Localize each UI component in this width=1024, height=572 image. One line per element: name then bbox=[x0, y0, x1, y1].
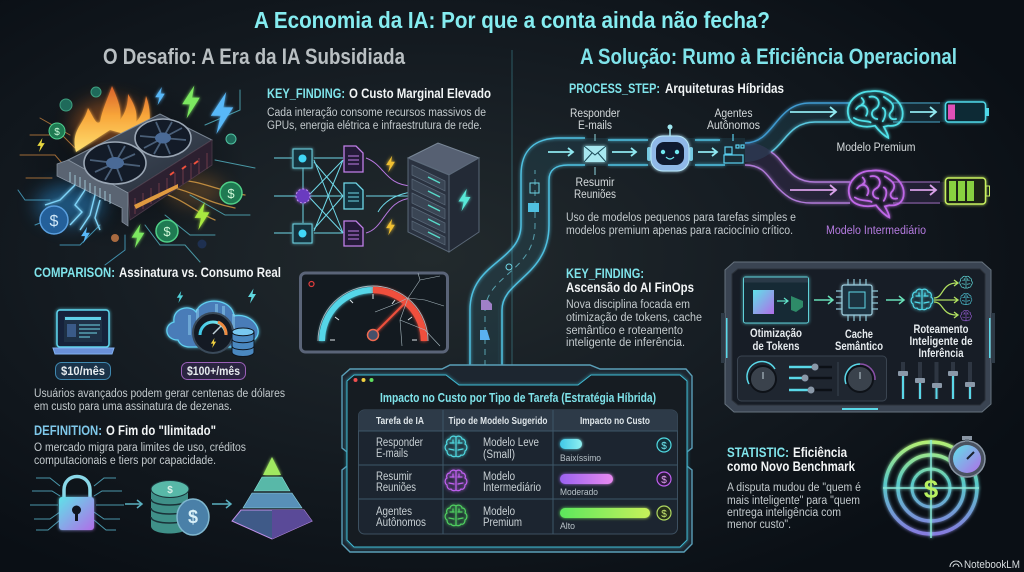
text block: statistic bbox=[727, 445, 861, 531]
label: resumir reunioes bbox=[574, 177, 616, 201]
heading: right column: A Solução: Rumo à Eficiência Operacional bbox=[580, 44, 957, 69]
row: responder e-mails: Baixíssimo bbox=[560, 453, 601, 464]
arrow: to routing bbox=[886, 296, 904, 304]
text block: statistic: entrega inteligência com bbox=[727, 507, 841, 519]
table header: Tipo de Modelo Sugerido bbox=[448, 415, 548, 427]
row: resumir reunioes: Reuniões bbox=[376, 482, 416, 494]
icon: premium brain bbox=[848, 91, 903, 138]
text block: process step heading bbox=[569, 81, 784, 96]
label: token optimization: de Tokens bbox=[752, 339, 800, 353]
text block: definition: O mercado migra para limites de uso, créditos bbox=[34, 442, 246, 454]
row: responder e-mails: $ bbox=[661, 441, 667, 452]
label: resumir reunioes: Resumir bbox=[576, 177, 615, 189]
label: inference routing: Inteligente de bbox=[910, 334, 973, 348]
heading: comparison: COMPARISON: bbox=[34, 265, 115, 280]
label: modelo intermediario: Modelo Intermediário bbox=[826, 225, 926, 237]
row: responder e-mails bbox=[376, 436, 671, 464]
icon: agent folder bbox=[724, 134, 744, 163]
label: inference routing bbox=[910, 322, 973, 360]
text block: process step heading: Arquiteturas Híbridas bbox=[665, 81, 784, 96]
row: agentes autonomos: Autônomos bbox=[376, 517, 426, 529]
row: responder e-mails: (Small) bbox=[483, 449, 515, 461]
icon: cloud usage meter bbox=[167, 288, 258, 356]
label: inference routing: Roteamento bbox=[914, 322, 968, 336]
text block: hybrid usage: Uso de modelos pequenos para tarefas simples e bbox=[566, 212, 796, 224]
illustration: overheating GPU: $ bbox=[227, 186, 235, 201]
row: resumir reunioes: Intermediário bbox=[483, 482, 541, 494]
label: resumir reunioes: Reuniões bbox=[574, 189, 616, 201]
text block: definition: DEFINITION: bbox=[34, 423, 102, 438]
text block: statistic: menor custo". bbox=[727, 519, 791, 531]
text block: comparison note: em custo para uma assinatura de dezenas. bbox=[34, 401, 232, 413]
text block: AI FinOps bbox=[566, 266, 702, 349]
panel: broken speedometer bbox=[300, 273, 448, 352]
row: responder e-mails: E-mails bbox=[376, 448, 408, 460]
diagram: network to server bbox=[274, 143, 479, 252]
arrow: to cache bbox=[814, 296, 833, 304]
text block: key finding, marginal cost: GPUs, energia elétrica e infraestrutura de rede. bbox=[267, 120, 482, 132]
label: semantic cache bbox=[835, 327, 883, 353]
illustration: road through hybrid architecture bbox=[470, 103, 945, 366]
text block: AI FinOps: otimização de tokens, cache bbox=[566, 312, 702, 324]
illustration: overheating GPU: $ bbox=[54, 127, 60, 138]
label: ten per month: $10/mês bbox=[61, 364, 105, 378]
arrow: coins to pyramid bbox=[212, 500, 231, 508]
text block: statistic: A disputa mudou de "quem é bbox=[727, 482, 861, 494]
text block: statistic: Eficiência bbox=[793, 445, 847, 460]
label: inference routing: Inferência bbox=[918, 346, 964, 360]
panel: cost impact table bbox=[342, 365, 692, 552]
text block: key finding, marginal cost bbox=[267, 86, 491, 132]
row: resumir reunioes bbox=[376, 470, 671, 498]
label: responder e-mails: Responder bbox=[570, 108, 620, 120]
arrow: padlock to coins bbox=[125, 500, 142, 508]
label: hundred per month: $100+/mês bbox=[187, 364, 240, 378]
icon: intermediate brain bbox=[849, 170, 904, 217]
label: token optimization bbox=[750, 326, 802, 353]
row: resumir reunioes: Resumir bbox=[376, 471, 412, 483]
icon: target with stopwatch: $ bbox=[924, 474, 939, 504]
text block: comparison note: Usuários avançados podem gerar centenas de dólares bbox=[34, 388, 285, 400]
text block: process step heading: PROCESS_STEP: bbox=[569, 81, 660, 96]
text block: AI FinOps: inteligente de inferência. bbox=[566, 337, 685, 349]
table header bbox=[376, 415, 650, 427]
text block: AI FinOps: Ascensão do AI FinOps bbox=[566, 280, 694, 295]
text block: key finding, marginal cost: Cada interação consome recursos massivos de bbox=[267, 107, 486, 119]
text block: key finding, marginal cost: O Custo Marginal Elevado bbox=[349, 86, 491, 101]
text block: definition: O Fim do "Ilimitado" bbox=[106, 423, 216, 438]
heading: comparison bbox=[34, 265, 281, 280]
label: responder e-mails bbox=[570, 108, 620, 132]
row: agentes autonomos: Alto bbox=[560, 521, 575, 532]
illustration: overheating GPU: $ bbox=[163, 224, 171, 239]
title: A Economia da IA: Por que a conta ainda não fecha? bbox=[254, 7, 770, 33]
icon: full battery bbox=[946, 178, 990, 204]
icon: coin stack: $ bbox=[188, 507, 198, 527]
icon: robot bbox=[647, 124, 693, 171]
center divider line bbox=[511, 50, 513, 366]
row: agentes autonomos: Agentes bbox=[376, 506, 412, 518]
row: agentes autonomos: Modelo bbox=[483, 506, 515, 518]
text block: AI FinOps: KEY_FINDING: bbox=[566, 266, 644, 281]
row: resumir reunioes: Moderado bbox=[560, 487, 598, 498]
text block: AI FinOps: semântico e roteamento bbox=[566, 325, 683, 337]
sub-panel: knobs and sliders bbox=[738, 356, 886, 401]
row: responder e-mails: Modelo Leve bbox=[483, 437, 539, 449]
panel: FinOps console bbox=[721, 262, 995, 412]
sub-panel: faders bbox=[898, 362, 975, 399]
illustration: overheating GPU bbox=[15, 80, 255, 265]
text block: key finding, marginal cost: KEY_FINDING: bbox=[267, 86, 345, 101]
icon: low battery bbox=[946, 102, 989, 122]
row: responder e-mails: Responder bbox=[376, 437, 423, 449]
sub-icon: semantic cache chip bbox=[836, 279, 878, 321]
icon: envelope bbox=[584, 134, 606, 175]
icon: target with stopwatch bbox=[883, 436, 985, 538]
label: agentes autonomos: Autônomos bbox=[707, 120, 760, 132]
label: semantic cache: Cache bbox=[845, 327, 873, 341]
label: agentes autonomos: Agentes bbox=[714, 108, 753, 120]
illustration: overheating GPU: $ bbox=[50, 213, 59, 230]
table header: Impacto no Custo bbox=[580, 415, 650, 427]
text block: statistic: STATISTIC: bbox=[727, 445, 789, 460]
text block: definition: computacionais e tiers por capacidade. bbox=[34, 455, 216, 467]
table header: Tarefa de IA bbox=[376, 415, 424, 427]
label: semantic cache: Semântico bbox=[835, 339, 883, 353]
row: agentes autonomos: $ bbox=[661, 509, 667, 520]
icon: tier pyramid bbox=[232, 457, 312, 539]
heading: comparison: Assinatura vs. Consumo Real bbox=[119, 265, 281, 280]
sub-icon: routing brain bbox=[911, 276, 972, 321]
row: agentes autonomos bbox=[376, 505, 671, 532]
text block: hybrid usage bbox=[566, 212, 796, 237]
table grid bbox=[358, 410, 678, 534]
icon: coin stack: $ bbox=[167, 485, 173, 496]
text block: definition bbox=[34, 423, 246, 467]
table title: Impacto no Custo por Tipo de Tarefa (Estratégia Híbrida) bbox=[380, 391, 656, 405]
sub-icon: token optimization window bbox=[744, 277, 808, 323]
label: modelo premium: Modelo Premium bbox=[836, 142, 916, 154]
text block: comparison note bbox=[34, 388, 285, 413]
icon: coin stack bbox=[151, 480, 209, 535]
text block: hybrid usage: modelos premium apenas para raciocínio crítico. bbox=[566, 225, 793, 237]
row: resumir reunioes: $ bbox=[661, 475, 667, 486]
heading: left column: O Desafio: A Era da IA Subsidiada bbox=[103, 44, 406, 69]
label: agentes autonomos bbox=[707, 108, 760, 132]
row: resumir reunioes: Modelo bbox=[483, 471, 515, 483]
icon: laptop subscription bbox=[53, 310, 114, 354]
text block: statistic: mais inteligente" para "quem bbox=[727, 495, 860, 507]
icon: padlock with circuits bbox=[30, 476, 124, 530]
label: token optimization: Otimização bbox=[750, 326, 802, 340]
label: responder e-mails: E-mails bbox=[578, 120, 612, 132]
text block: AI FinOps: Nova disciplina focada em bbox=[566, 299, 690, 311]
text block: statistic: como Novo Benchmark bbox=[727, 459, 855, 474]
row: agentes autonomos: Premium bbox=[483, 517, 522, 529]
